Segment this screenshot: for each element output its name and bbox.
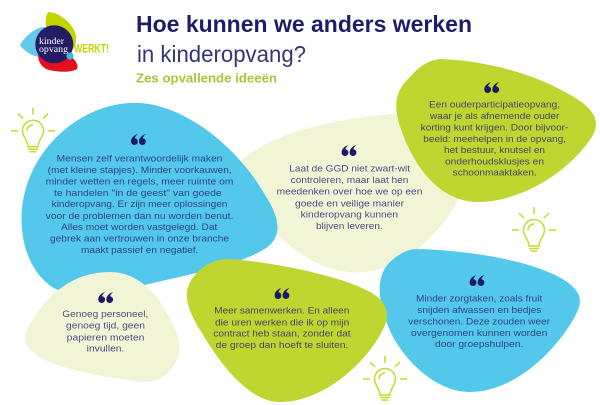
text: enough staff idea: Genoeg personeel, (62, 308, 148, 319)
text: responsibility idea: (met kleine stapjes). Minder voorkauwen, (48, 164, 232, 175)
text: enough staff idea: genoeg tijd, geen (66, 320, 145, 331)
icon: quote mark (342, 145, 356, 156)
text: responsibility idea: voor de problemen dan nu worden benut. (46, 210, 233, 221)
text: responsibility idea (46, 152, 234, 255)
logo: opvang (39, 45, 68, 55)
text: collaboration idea: Meer samenwerken. En alleen (214, 305, 349, 316)
text: GGD idea: Laat de GGD niet zwart-wit (289, 162, 410, 173)
icon: quote mark (275, 288, 289, 299)
text: responsibility idea: gebrek aan vertrouwen in onze branche (50, 233, 229, 244)
subtitle: Zes opvallende ideeën (136, 72, 277, 86)
text: GGD idea: blijven leveren. (316, 220, 383, 231)
panel: collaboration idea (187, 259, 387, 402)
text: parent participation idea: schoonmaaktaken. (453, 167, 537, 178)
text: care tasks idea: snijden afwassen en bedjes (417, 304, 542, 315)
text: responsibility idea: Alles moet worden vastgelegd. Dat (61, 221, 218, 232)
text: GGD idea: goede en veilige manier (295, 197, 404, 208)
text: enough staff idea: papieren moeten (67, 331, 144, 342)
text: care tasks idea: overgenomen kunnen worden (411, 327, 547, 338)
text: GGD idea: kinderopvang kunnen (301, 209, 398, 220)
text: GGD idea: meedenken over hoe we op een (277, 185, 422, 196)
text: parent participation idea: korting kunt krijgen. Door bijvoor- (421, 121, 568, 132)
text: parent participation idea (421, 98, 568, 178)
text: collaboration idea: die uren werken die ik op mijn (215, 316, 349, 327)
icon: quote mark (98, 292, 113, 303)
panel: parent participation idea (396, 59, 596, 202)
icon: light bulb top left (11, 108, 55, 152)
text: parent participation idea: onderhoudsklusjes en (445, 156, 544, 167)
text: enough staff idea: invullen. (87, 342, 124, 353)
text: GGD idea (277, 162, 422, 231)
text: parent participation idea: Een ouderparticipatieopvang, (429, 98, 560, 109)
text: parent participation idea: waar je als afnemende ouder (429, 110, 559, 121)
title: in kinderopvang? (137, 41, 306, 67)
icon: quote mark (484, 82, 499, 93)
icon: light bulb right (512, 207, 556, 251)
text: responsibility idea: Mensen zelf verantwoordelijk maken (57, 152, 222, 164)
panel: GGD idea (238, 113, 472, 272)
icon: quote mark (470, 275, 484, 286)
text: responsibility idea: kinderopvang. Er zijn meer oplossingen (52, 198, 227, 209)
panel: responsibility idea (22, 103, 278, 293)
text: parent participation idea: het bestuur, knutsel en (444, 144, 545, 155)
text: care tasks idea: door groepshulpen. (435, 338, 523, 349)
text: responsibility idea: te handelen "in de geest" van goede (54, 187, 222, 198)
text: enough staff idea (62, 308, 148, 353)
text: collaboration idea: contract heb staan, zonder dat (213, 328, 351, 339)
text: parent participation idea: beeld: meehelpen in de opvang, (423, 133, 566, 144)
logo: kinder (39, 37, 65, 47)
panel: care tasks idea (380, 249, 580, 392)
text: collaboration idea: de groep dan hoeft te sluiten. (216, 339, 348, 350)
panel: enough staff idea (25, 272, 180, 382)
logo: WERKT! (74, 44, 109, 56)
title (136, 11, 472, 67)
icon: light bulb bottom (363, 356, 407, 400)
text: GGD idea: controleren, maar laat hen (291, 174, 408, 185)
icon: quote mark (131, 134, 146, 145)
title: Hoe kunnen we anders werken (136, 11, 472, 37)
text: care tasks idea (408, 292, 550, 349)
text: responsibility idea: minder wetten en regels, meer ruimte om (46, 176, 234, 187)
logo (20, 12, 109, 72)
text: care tasks idea: Minder zorgtaken, zoals fruit (416, 292, 543, 303)
text: care tasks idea: verschonen. Deze zouden weer (408, 315, 550, 326)
text: collaboration idea (213, 305, 351, 350)
text: responsibility idea: maakt passief en negatief. (81, 244, 198, 255)
